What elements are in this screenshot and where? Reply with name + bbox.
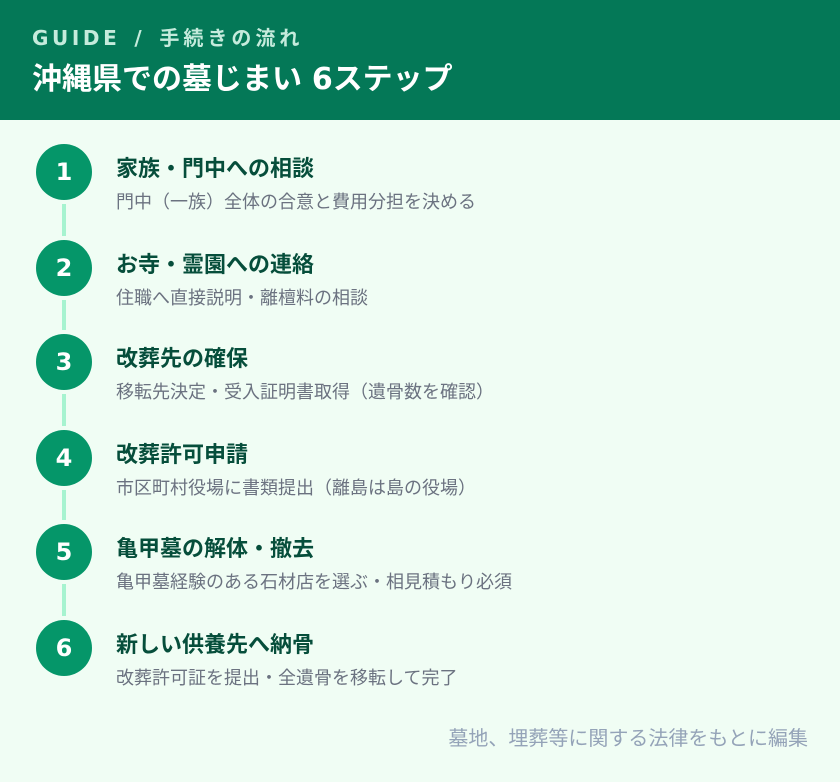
step 5 number bbox=[36, 524, 92, 580]
main title: 沖縄県での墓じまい 6ステップ bbox=[32, 54, 453, 98]
step 3 number bbox=[36, 334, 92, 390]
step 3 number: 3 bbox=[56, 348, 72, 376]
step 6 number: 6 bbox=[56, 634, 72, 662]
connector 5-6 bbox=[62, 584, 66, 616]
step 4 number bbox=[36, 430, 92, 486]
eyebrow label: GUIDE / 手続きの流れ bbox=[32, 22, 303, 51]
connector 2-3 bbox=[62, 300, 66, 330]
step 6 text bbox=[116, 627, 457, 690]
step 4 text bbox=[116, 437, 476, 500]
step 5 text: 亀甲墓の解体・撤去 bbox=[116, 531, 314, 563]
step 4 text: 改葬許可申請 bbox=[116, 437, 248, 469]
step 3 text: 移転先決定・受入証明書取得（遺骨数を確認） bbox=[116, 378, 494, 404]
step 5 text bbox=[116, 531, 512, 594]
step 1 text: 家族・門中への相談 bbox=[116, 151, 314, 183]
step 1 number bbox=[36, 144, 92, 200]
step 1 number: 1 bbox=[56, 158, 72, 186]
source note: 墓地、埋葬等に関する法律をもとに編集 bbox=[448, 722, 808, 751]
step 3 text bbox=[116, 341, 494, 404]
connector 4-5 bbox=[62, 490, 66, 520]
step 1 text bbox=[116, 151, 476, 214]
step 2 text: お寺・霊園への連絡 bbox=[116, 247, 314, 279]
step 5 number: 5 bbox=[56, 538, 72, 566]
step 3 text: 改葬先の確保 bbox=[116, 341, 248, 373]
step 6 text: 新しい供養先へ納骨 bbox=[116, 627, 314, 659]
connector 3-4 bbox=[62, 394, 66, 426]
step 4 number: 4 bbox=[56, 444, 72, 472]
header band bbox=[0, 0, 840, 120]
step 6 text: 改葬許可証を提出・全遺骨を移転して完了 bbox=[116, 664, 457, 690]
step 4 text: 市区町村役場に書類提出（離島は島の役場） bbox=[116, 474, 476, 500]
step 1 text: 門中（一族）全体の合意と費用分担を決める bbox=[116, 188, 476, 214]
step 2 number: 2 bbox=[56, 254, 72, 282]
step 2 text bbox=[116, 247, 368, 310]
step 6 number bbox=[36, 620, 92, 676]
step 5 text: 亀甲墓経験のある石材店を選ぶ・相見積もり必須 bbox=[116, 568, 512, 594]
connector 1-2 bbox=[62, 204, 66, 236]
step 2 number bbox=[36, 240, 92, 296]
step 2 text: 住職へ直接説明・離檀料の相談 bbox=[116, 284, 368, 310]
